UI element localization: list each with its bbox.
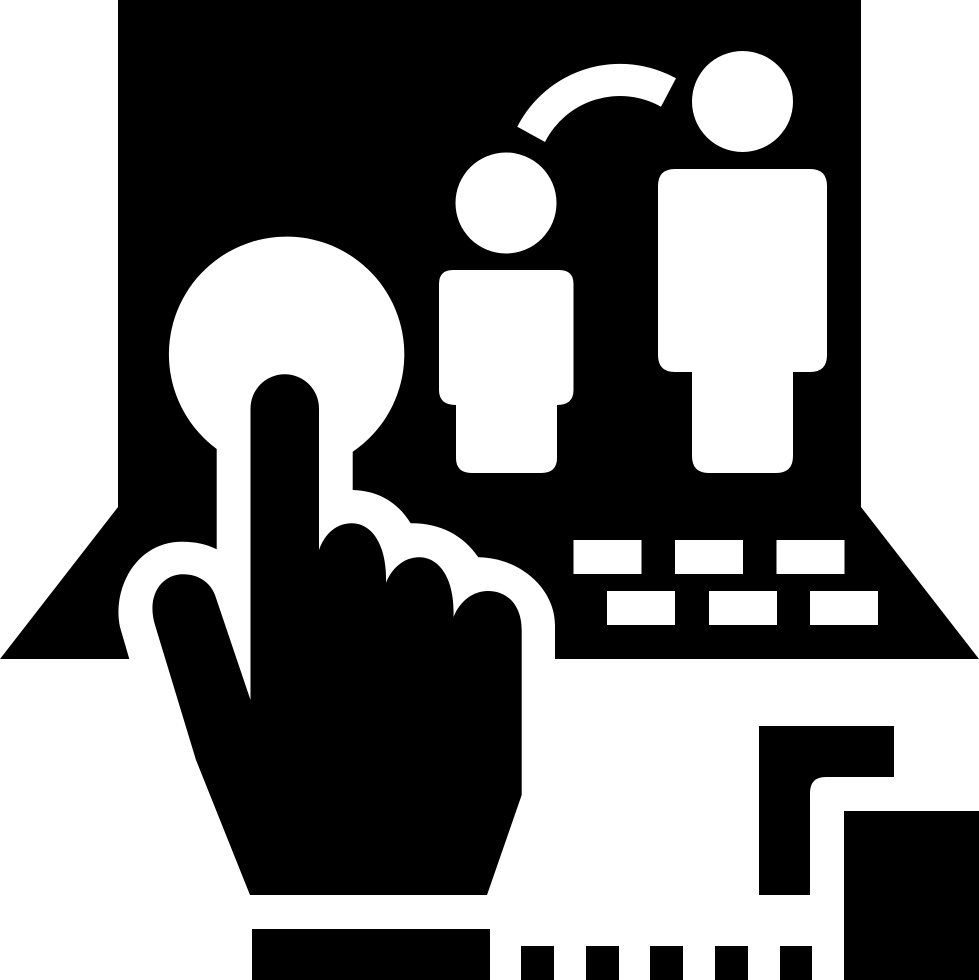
icon: bracket shape: [759, 726, 894, 895]
icon: laptop body: [0, 0, 979, 659]
icon: tap circle and hand outline: [118, 237, 555, 659]
arrow: arc between people: [517, 64, 676, 142]
icon: bottom dashes: [521, 946, 812, 980]
icon: hand: [152, 374, 522, 895]
icon: smaller person: [439, 152, 574, 473]
icon: sleeve cuff: [252, 929, 490, 980]
icon: laptop keys: [574, 540, 878, 625]
icon: larger person: [658, 51, 827, 473]
icon: corner block: [844, 811, 979, 980]
